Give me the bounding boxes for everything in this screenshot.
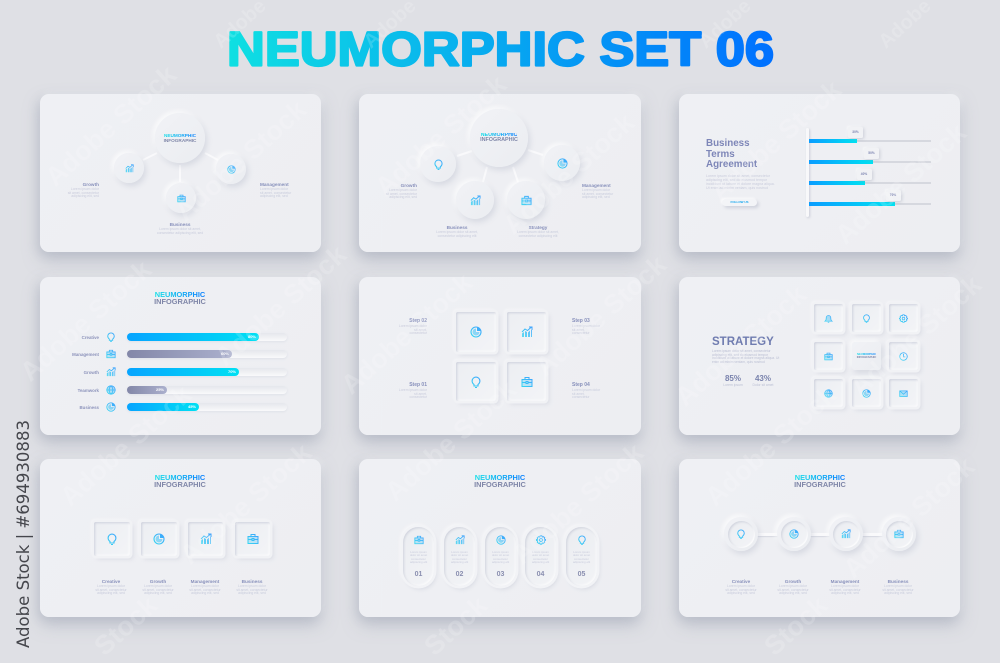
label: step 01: sit amet, bbox=[414, 392, 427, 396]
label: step 04: Step 04 bbox=[572, 382, 590, 388]
central circle: INFOGRAPHIC bbox=[164, 138, 196, 143]
watermark overlay: Adobe Stock bbox=[704, 74, 848, 207]
pill 01: 01 bbox=[415, 571, 422, 578]
label: growth: Lorem ipsum dolor bbox=[144, 584, 172, 588]
heading: INFOGRAPHIC bbox=[154, 296, 206, 306]
watermark overlay: Adobe Stock bbox=[379, 374, 523, 507]
body text: adipiscing elit, sed do eiusmod tempor bbox=[712, 353, 768, 357]
cell: briefcase bbox=[814, 342, 843, 370]
pill 02: 02 bbox=[456, 571, 463, 578]
label: management: sit amet, consectetur bbox=[260, 191, 291, 195]
label: growth: Lorem ipsum dolor bbox=[71, 187, 99, 191]
bar: business 45%: 45% bbox=[188, 404, 196, 409]
pill 04: consectetur bbox=[533, 557, 548, 561]
stat: 85%: Lorem ipsum bbox=[723, 382, 743, 386]
label: growth bbox=[142, 578, 174, 595]
pill 01 bbox=[403, 527, 434, 586]
label: growth: adipiscing elit, sed bbox=[389, 195, 417, 199]
bar: teamwork 25%: 25% bbox=[156, 387, 164, 392]
stat: 43%: Dolor sit amet bbox=[753, 382, 773, 386]
square: briefcase bbox=[235, 522, 270, 556]
label: strategy: Lorem ipsum dolor sit amet, bbox=[517, 230, 559, 234]
bar: business 45% bbox=[127, 403, 287, 411]
bar fill 2 bbox=[809, 160, 873, 164]
bar track 1 bbox=[809, 140, 931, 142]
row label: management: Management bbox=[72, 352, 99, 356]
label: business: Business bbox=[888, 578, 908, 584]
label: business: sit amet, consectetur bbox=[882, 588, 914, 592]
bar: creative 80% bbox=[127, 333, 287, 341]
label: management: Management bbox=[191, 578, 219, 584]
node: strategy bbox=[507, 181, 545, 219]
bar track 4 bbox=[809, 203, 931, 205]
heading bbox=[706, 138, 757, 170]
watermark overlay: Adobe Stock bbox=[829, 117, 973, 250]
square: bulb bbox=[456, 362, 496, 401]
node: management bbox=[216, 154, 246, 184]
panel: five numbered pills bbox=[359, 459, 641, 617]
cell: centre raised title: NEUMORPHIC bbox=[857, 352, 876, 356]
pill 03: 03 bbox=[497, 571, 504, 578]
panel: business terms agreement bbox=[679, 94, 960, 252]
stat: 43% bbox=[752, 374, 774, 386]
label: management bbox=[260, 182, 291, 198]
label: step 03: Lorem ipsum dolor bbox=[572, 324, 600, 328]
label: management: Lorem ipsum dolor bbox=[191, 584, 219, 588]
label: business bbox=[882, 578, 914, 595]
pill 02: adipiscing elit bbox=[451, 560, 468, 564]
label: creative: sit amet, consectetur bbox=[725, 588, 757, 592]
square: briefcase bbox=[507, 362, 546, 401]
label: growth: Growth bbox=[785, 578, 801, 584]
connectors bbox=[143, 152, 216, 180]
panel: circles with three nodes bbox=[40, 94, 321, 252]
cell: bulb bbox=[852, 304, 881, 332]
watermark overlay: Stock bbox=[88, 589, 164, 661]
label: step 03: consectetur bbox=[572, 331, 590, 335]
stock id side label: Adobe Stock | #694930883 bbox=[14, 420, 34, 648]
label: management: sit amet, consectetur bbox=[829, 588, 861, 592]
body text bbox=[706, 174, 775, 190]
label: business: adipiscing elit, sed bbox=[884, 591, 912, 595]
label: creative: adipiscing elit, sed bbox=[97, 591, 125, 595]
bar: management 60% bbox=[127, 350, 287, 358]
label: creative: adipiscing elit, sed bbox=[727, 591, 755, 595]
row label: teamwork: Teamwork bbox=[78, 388, 99, 392]
pill 04: adipiscing elit bbox=[532, 560, 549, 564]
label: step 02: Lorem ipsum dolor bbox=[399, 324, 427, 328]
heading bbox=[794, 472, 846, 488]
heading bbox=[154, 472, 206, 488]
label: step 02: sit amet, bbox=[414, 328, 427, 332]
stat: 43%: 43% bbox=[755, 374, 771, 383]
watermark overlay: Adobe Stock bbox=[844, 269, 988, 402]
node: business bbox=[456, 181, 494, 219]
pill 01: consectetur bbox=[411, 557, 426, 561]
label: growth: Lorem ipsum dolor bbox=[389, 188, 417, 192]
value bubble 30%: 30% bbox=[852, 130, 859, 134]
label: growth: sit amet, consectetur bbox=[142, 588, 174, 592]
pill 03 bbox=[485, 527, 516, 586]
pill 03: adipiscing elit bbox=[492, 560, 509, 564]
pill 05: consectetur bbox=[574, 557, 589, 561]
label: management: adipiscing elit, sed bbox=[191, 591, 219, 595]
body text: enim ad minim veniam, quis nostrud bbox=[712, 360, 765, 364]
watermark overlay: Adobe Stock bbox=[174, 437, 318, 570]
label: business: consectetur adipiscing elit, sed bbox=[157, 231, 203, 235]
square: chart bbox=[188, 522, 223, 556]
title: NEUMORPHIC SET 06 bbox=[227, 24, 774, 76]
row label: growth: Growth bbox=[84, 370, 99, 374]
watermark overlay: Adobe Stock bbox=[699, 379, 843, 512]
body text: incididunt ut labore et dolore magna aliqua. bbox=[706, 182, 775, 186]
label: management: Lorem ipsum dolor bbox=[260, 187, 288, 191]
label: step 03 bbox=[572, 318, 600, 335]
heading: NEUMORPHIC bbox=[475, 472, 525, 482]
connectors bbox=[457, 150, 542, 181]
pill 04: Lorem ipsum bbox=[532, 550, 549, 554]
node: management bbox=[544, 145, 580, 181]
stat: 85% bbox=[723, 374, 743, 387]
label: creative bbox=[95, 578, 127, 595]
heading: Business bbox=[706, 138, 750, 149]
pill 01: Lorem ipsum bbox=[410, 550, 427, 554]
watermark overlay: Adobe Stock bbox=[54, 379, 198, 512]
pill 03: consectetur bbox=[493, 557, 508, 561]
heading: INFOGRAPHIC bbox=[794, 480, 846, 488]
cell: pie bbox=[852, 379, 881, 407]
label: business: Lorem ipsum dolor sit amet, bbox=[159, 227, 201, 231]
body text: Ut enim ad minim veniam, quis nostrud bbox=[706, 186, 768, 190]
watermark overlay: Adobe Stock bbox=[529, 249, 673, 382]
pill 02: consectetur bbox=[452, 557, 467, 561]
label: management: adipiscing elit, sed bbox=[831, 591, 859, 595]
central circle: INFOGRAPHIC bbox=[480, 137, 518, 143]
watermark overlay: Adobe Stock bbox=[14, 254, 158, 387]
label: growth: sit amet, consectetur bbox=[68, 191, 99, 195]
square: chart bbox=[507, 312, 546, 352]
label: step 02: consectetur bbox=[409, 331, 427, 335]
watermark overlay: Adobe Stock bbox=[39, 59, 183, 192]
label: creative: Creative bbox=[102, 578, 120, 584]
label: management: Management bbox=[260, 182, 289, 186]
row label: business: Business bbox=[79, 404, 99, 410]
heading: NEUMORPHIC bbox=[155, 290, 205, 298]
label: management: Lorem ipsum dolor bbox=[831, 584, 859, 588]
square: pie bbox=[141, 522, 177, 556]
pill 05: dolor sit amet bbox=[573, 553, 590, 557]
label: business bbox=[436, 224, 478, 238]
icon: pie bbox=[106, 402, 116, 412]
label: step 01: Step 01 bbox=[409, 382, 427, 388]
label: step 02: Step 02 bbox=[409, 318, 427, 324]
panel: connected circles timeline bbox=[679, 459, 960, 617]
watermark overlay: Adobe Stock bbox=[335, 267, 479, 400]
label: creative: Lorem ipsum dolor bbox=[97, 584, 125, 588]
label: growth: Growth bbox=[150, 578, 166, 584]
watermark overlay: Adobe Stock bbox=[669, 279, 813, 412]
watermark overlay: Adobe Stock bbox=[369, 69, 513, 202]
node: pie bbox=[777, 517, 811, 551]
bar fill 3 bbox=[809, 181, 865, 185]
square: bulb bbox=[94, 522, 130, 556]
pill 05: 05 bbox=[578, 571, 585, 578]
label: creative: sit amet, consectetur bbox=[95, 588, 127, 592]
label: business: Business bbox=[242, 578, 262, 584]
node: bulb bbox=[724, 517, 758, 551]
body text: Lorem ipsum dolor sit amet, consectetur bbox=[712, 349, 771, 353]
pill 05 bbox=[566, 527, 597, 586]
label: business: Lorem ipsum dolor bbox=[884, 584, 912, 588]
node: growth bbox=[114, 153, 144, 183]
label: management bbox=[189, 578, 221, 595]
heading: Agreement bbox=[706, 159, 757, 170]
body text: Lorem ipsum dolor sit amet, consectetur bbox=[706, 174, 770, 178]
heading: STRATEGY bbox=[712, 336, 774, 348]
watermark overlay: Adobe Stock bbox=[497, 107, 641, 240]
cell: clock bbox=[889, 342, 918, 370]
bar fill 1 bbox=[809, 139, 857, 143]
label: step 04: sit amet, bbox=[572, 392, 585, 396]
label: business: sit amet, consectetur bbox=[236, 588, 268, 592]
label: growth: sit amet, consectetur bbox=[386, 192, 417, 196]
bar: growth 70% bbox=[127, 368, 287, 376]
cell: centre raised title: INFOGRAPHIC bbox=[857, 355, 876, 359]
panel: strategy grid bbox=[679, 277, 960, 435]
heading: INFOGRAPHIC bbox=[154, 480, 206, 488]
label: business bbox=[236, 578, 268, 595]
label: management: Management bbox=[582, 182, 611, 188]
value bubble 40% bbox=[856, 168, 872, 180]
pill 02: dolor sit amet bbox=[451, 553, 468, 557]
value bubble 70%: 70% bbox=[890, 192, 896, 196]
label: business: Business bbox=[170, 222, 190, 226]
label: management: adipiscing elit, sed bbox=[582, 195, 610, 199]
label: growth bbox=[386, 182, 417, 199]
heading bbox=[154, 290, 206, 306]
pill 02 bbox=[444, 527, 475, 586]
label: step 03: sit amet, bbox=[572, 328, 585, 332]
bar: management 60%: 60% bbox=[221, 351, 229, 356]
panel: four step squares bbox=[359, 277, 641, 435]
label: step 01: Lorem ipsum dolor bbox=[399, 388, 427, 392]
label: management: sit amet, consectetur bbox=[582, 192, 613, 196]
label: step 01 bbox=[399, 382, 427, 399]
label: management: adipiscing elit, sed bbox=[260, 194, 288, 198]
label: strategy: consectetur adipiscing elit bbox=[519, 234, 557, 238]
label: business: Lorem ipsum dolor bbox=[238, 584, 266, 588]
icon: chart bbox=[106, 367, 116, 376]
pill 05: adipiscing elit bbox=[573, 560, 590, 564]
label: creative bbox=[725, 578, 757, 595]
watermark overlay: Stock bbox=[418, 589, 494, 661]
watermark overlay: Adobe Stock bbox=[837, 451, 981, 584]
square: pie bbox=[456, 312, 496, 352]
label: step 04: consectetur bbox=[572, 395, 590, 399]
label: strategy: Strategy bbox=[529, 224, 547, 230]
label: management: Management bbox=[831, 578, 859, 584]
body text: adipiscing elit, sed do eiusmod tempor bbox=[706, 178, 767, 182]
button bbox=[722, 199, 757, 206]
value bubble 50% bbox=[864, 148, 879, 158]
heading: Terms bbox=[706, 148, 735, 160]
label: business: consectetur adipiscing elit bbox=[438, 234, 476, 238]
value bubble 70% bbox=[886, 190, 900, 200]
label: business: Business bbox=[447, 224, 467, 230]
pill 04: dolor sit amet bbox=[532, 553, 549, 557]
cell: centre raised title bbox=[852, 342, 881, 370]
icon: globe bbox=[106, 385, 116, 395]
label: step 02 bbox=[399, 318, 427, 335]
stat: 85%: 85% bbox=[725, 374, 741, 383]
heading: INFOGRAPHIC bbox=[474, 480, 526, 488]
vertical axis bbox=[806, 128, 809, 217]
row label: creative: Creative bbox=[82, 334, 99, 340]
label: business: Lorem ipsum dolor sit amet, bbox=[436, 230, 478, 234]
bar: growth 70%: 70% bbox=[228, 369, 236, 374]
central circle: NEUMORPHIC bbox=[164, 133, 196, 138]
node: chart bbox=[829, 517, 863, 551]
heading bbox=[474, 472, 526, 488]
pill 02: Lorem ipsum bbox=[451, 550, 468, 554]
value bubble 40%: 40% bbox=[861, 172, 867, 176]
bar track 3 bbox=[809, 182, 931, 184]
watermark overlay: Stock bbox=[758, 589, 834, 661]
bar: creative 80%: 80% bbox=[248, 334, 256, 339]
watermark overlay: Adobe Stock bbox=[506, 437, 650, 570]
label: management: sit amet, consectetur bbox=[189, 588, 221, 592]
node: growth bbox=[420, 146, 456, 182]
pill 03: dolor sit amet bbox=[492, 553, 509, 557]
pill 04 bbox=[525, 527, 556, 586]
label: growth: adipiscing elit, sed bbox=[779, 591, 807, 595]
pill 05: Lorem ipsum bbox=[573, 550, 590, 554]
cell: globe bbox=[814, 379, 843, 407]
label: growth: Growth bbox=[83, 182, 99, 186]
label: growth bbox=[777, 578, 809, 595]
panel: circles with four nodes bbox=[359, 94, 641, 252]
label: strategy bbox=[517, 224, 559, 238]
node: business bbox=[166, 183, 196, 213]
label: growth: Lorem ipsum dolor bbox=[779, 584, 807, 588]
label: management bbox=[829, 578, 861, 595]
label: step 03: Step 03 bbox=[572, 318, 590, 324]
cell: gear bbox=[889, 304, 918, 332]
label: management: Lorem ipsum dolor bbox=[582, 188, 610, 192]
bar: teamwork 25% bbox=[127, 386, 287, 394]
central circle bbox=[470, 109, 528, 167]
label: growth: adipiscing elit, sed bbox=[144, 591, 172, 595]
central circle: NEUMORPHIC bbox=[481, 132, 517, 138]
label: growth bbox=[68, 182, 99, 198]
value bubble 30% bbox=[848, 126, 863, 138]
panel: four squares in a row bbox=[40, 459, 321, 617]
watermark overlay: Adobe Stock bbox=[169, 94, 313, 227]
body text: incididunt ut labore et dolore magna aliqua. Ut bbox=[712, 356, 779, 360]
label: growth: sit amet, consectetur bbox=[777, 588, 809, 592]
connector line bbox=[741, 533, 899, 536]
bar fill 4 bbox=[809, 202, 895, 206]
watermark overlay: Adobe Stock bbox=[209, 239, 353, 372]
label: creative: Lorem ipsum dolor bbox=[727, 584, 755, 588]
label: business bbox=[157, 222, 203, 235]
label: step 04: Lorem ipsum dolor bbox=[572, 388, 600, 392]
label: creative: Creative bbox=[732, 578, 750, 584]
node: briefcase bbox=[882, 517, 916, 551]
heading: NEUMORPHIC bbox=[795, 472, 845, 482]
panel: horizontal progress bars bbox=[40, 277, 321, 435]
label: business: adipiscing elit, sed bbox=[238, 591, 266, 595]
label: step 04 bbox=[572, 382, 600, 399]
icon: bulb bbox=[107, 332, 115, 342]
pill 04: 04 bbox=[537, 571, 544, 578]
label: growth: adipiscing elit, sed bbox=[71, 194, 99, 198]
bar track 2 bbox=[809, 161, 931, 163]
cell: mail bbox=[889, 379, 918, 407]
button: FOLLOW US bbox=[730, 200, 748, 204]
label: growth: Growth bbox=[401, 182, 417, 188]
cell: bell bbox=[814, 304, 843, 332]
body text bbox=[712, 349, 780, 364]
label: management bbox=[582, 182, 613, 199]
label: step 01: consectetur bbox=[409, 395, 427, 399]
central circle bbox=[155, 113, 205, 163]
value bubble 50%: 50% bbox=[868, 150, 875, 154]
pill 01: adipiscing elit bbox=[410, 560, 427, 564]
heading: NEUMORPHIC bbox=[155, 472, 205, 482]
icon: briefcase bbox=[106, 350, 116, 358]
pill 01: dolor sit amet bbox=[410, 553, 427, 557]
pill 03: Lorem ipsum bbox=[492, 550, 509, 554]
